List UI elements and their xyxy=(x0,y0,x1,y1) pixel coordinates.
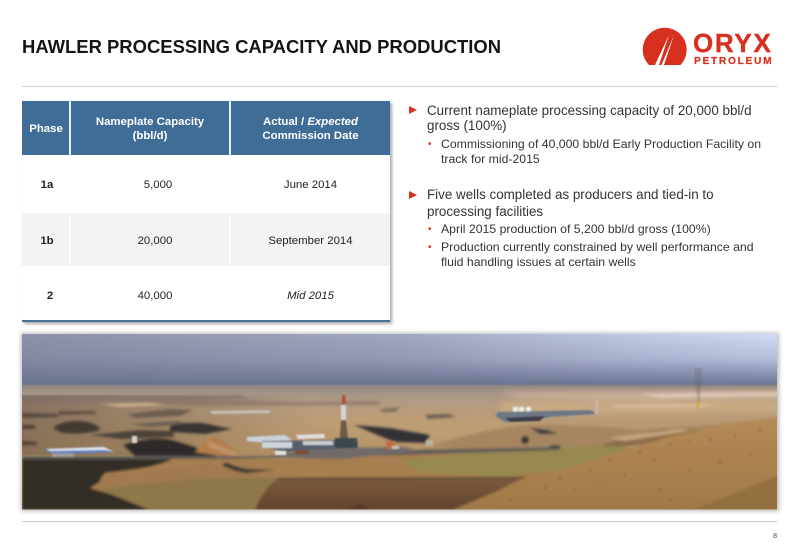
bullet list xyxy=(409,102,761,268)
table row 2 xyxy=(22,266,390,322)
road xyxy=(22,447,560,459)
big right hill xyxy=(453,417,780,512)
bullet: wells: April 2015 production of 5,200 bbl/d gross (100%) xyxy=(441,222,711,236)
table row 1b: September 2014 xyxy=(268,235,353,247)
table header row: (bbl/d) xyxy=(133,130,167,142)
bullet: nameplate capacity: Current nameplate processing capacity of 20,000 bbl/d xyxy=(427,102,752,118)
table row 1b: 1b xyxy=(40,235,54,247)
logo: Oryx Petroleum xyxy=(642,28,773,67)
foreground hills, left xyxy=(90,448,626,492)
bullet: wells: • xyxy=(428,242,432,252)
table row 2: 40,000 xyxy=(138,290,172,302)
table row 2: Mid 2015 xyxy=(287,290,334,302)
bullet: nameplate capacity: • xyxy=(428,139,432,150)
table row 1a: 5,000 xyxy=(144,179,172,191)
bullet: nameplate capacity: gross (100%) xyxy=(427,118,507,133)
site ground xyxy=(270,447,420,459)
distant plain banding xyxy=(500,390,780,400)
bullet: wells: processing facilities xyxy=(427,204,543,218)
table header row: Phase xyxy=(29,123,63,135)
table row 1a xyxy=(41,179,337,191)
bullet: nameplate capacity: Commissioning of 40,000 bbl/d Early Production Facility on xyxy=(441,137,761,151)
bullet: wells: fluid handling issues at certain wells xyxy=(441,254,636,268)
logo wordmark: PETROLEUM xyxy=(694,56,773,67)
dark cloud shadows on the plain xyxy=(90,394,246,400)
bullet: nameplate capacity xyxy=(409,102,761,166)
table header row: Actual / Expected xyxy=(263,116,358,128)
bullet: wells: • xyxy=(428,224,432,234)
bullet: wells: Production currently constrained by well performance and xyxy=(441,240,754,254)
table header row: Commission Date xyxy=(262,130,359,142)
table row 2: 2 xyxy=(47,290,53,302)
logo wordmark: ORYX xyxy=(693,28,773,58)
photo: panoramic view of Hawler field xyxy=(18,330,782,514)
icon: red dome with road streaks xyxy=(643,28,687,65)
page number: 8 xyxy=(773,533,777,540)
table row 1b xyxy=(22,213,390,266)
bullet: wells: Five wells completed as producers and tied-in to xyxy=(427,187,714,202)
header rule xyxy=(22,86,777,87)
processing facility and rig xyxy=(45,368,702,457)
bullet: wells xyxy=(409,187,754,268)
footer rule xyxy=(22,521,777,522)
table: processing phases xyxy=(22,101,390,322)
table row 1a: June 2014 xyxy=(284,179,337,191)
table row 1b: 20,000 xyxy=(138,235,172,247)
mid ground hills xyxy=(434,424,720,448)
table row 1a: 1a xyxy=(41,179,53,191)
title: HAWLER PROCESSING CAPACITY AND PRODUCTION xyxy=(22,36,501,57)
hill texture xyxy=(509,429,761,501)
bullet: nameplate capacity: track for mid-2015 xyxy=(441,152,540,166)
table header row: Nameplate Capacity xyxy=(96,116,204,128)
table header row xyxy=(22,101,390,155)
